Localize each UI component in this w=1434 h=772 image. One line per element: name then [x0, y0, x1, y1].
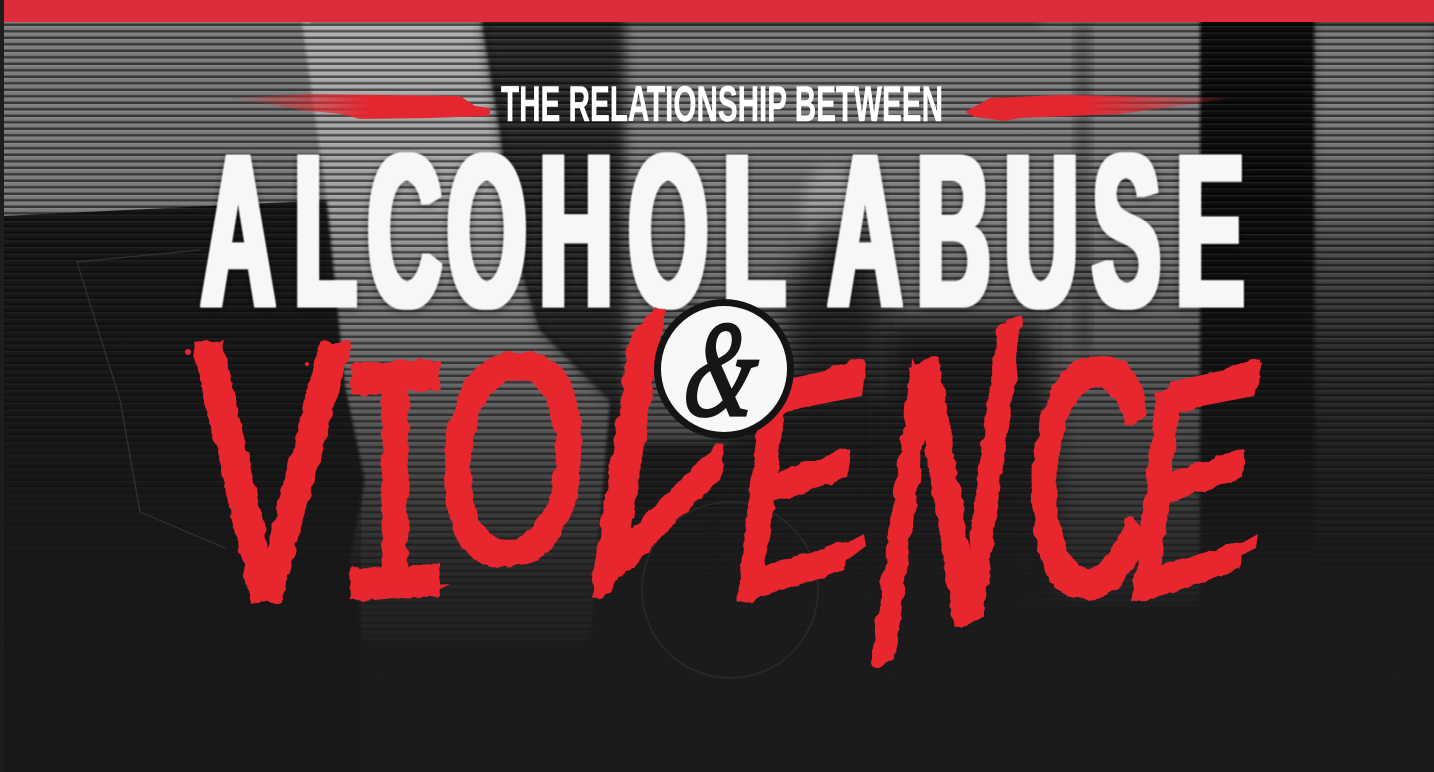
blurred figure in mid — [802, 165, 858, 265]
left red brush stroke — [225, 94, 490, 119]
title: violence brush lettering: V — [188, 265, 350, 680]
title: violence brush lettering: E — [1113, 293, 1276, 669]
title: violence brush lettering: L — [560, 123, 778, 701]
pocket stitching — [77, 250, 225, 548]
title: alcohol abuse: ALCOHOL ABUSE — [201, 110, 1244, 353]
dark shirt area — [482, 22, 640, 420]
title: violence brush lettering: N — [849, 219, 1045, 762]
wall upper left — [4, 22, 330, 216]
title: violence brush lettering: I — [335, 301, 455, 704]
dark vertical column — [1200, 14, 1314, 772]
ampersand badge — [654, 295, 794, 445]
dark torso left — [4, 203, 362, 772]
right wall — [1310, 22, 1434, 542]
paint splatter and brush spikes — [185, 325, 1262, 600]
shoe circle — [642, 502, 818, 678]
subtitle: THE RELATIONSHIP BETWEEN — [501, 76, 943, 132]
right red brush stroke — [965, 95, 1230, 121]
blurred lighter column — [1040, 22, 1205, 602]
title: violence brush lettering: C — [1021, 286, 1156, 670]
mid wall — [625, 22, 1215, 442]
ampersand badge: & — [677, 295, 768, 445]
title: violence brush lettering — [185, 123, 1276, 762]
dark torso overlay for contrast — [4, 203, 362, 772]
bright arm band — [302, 22, 610, 640]
title: violence brush lettering: O — [433, 288, 593, 629]
title: violence brush lettering: E — [718, 293, 881, 669]
bottom fade — [0, 210, 1434, 700]
top red bar — [4, 0, 1434, 22]
